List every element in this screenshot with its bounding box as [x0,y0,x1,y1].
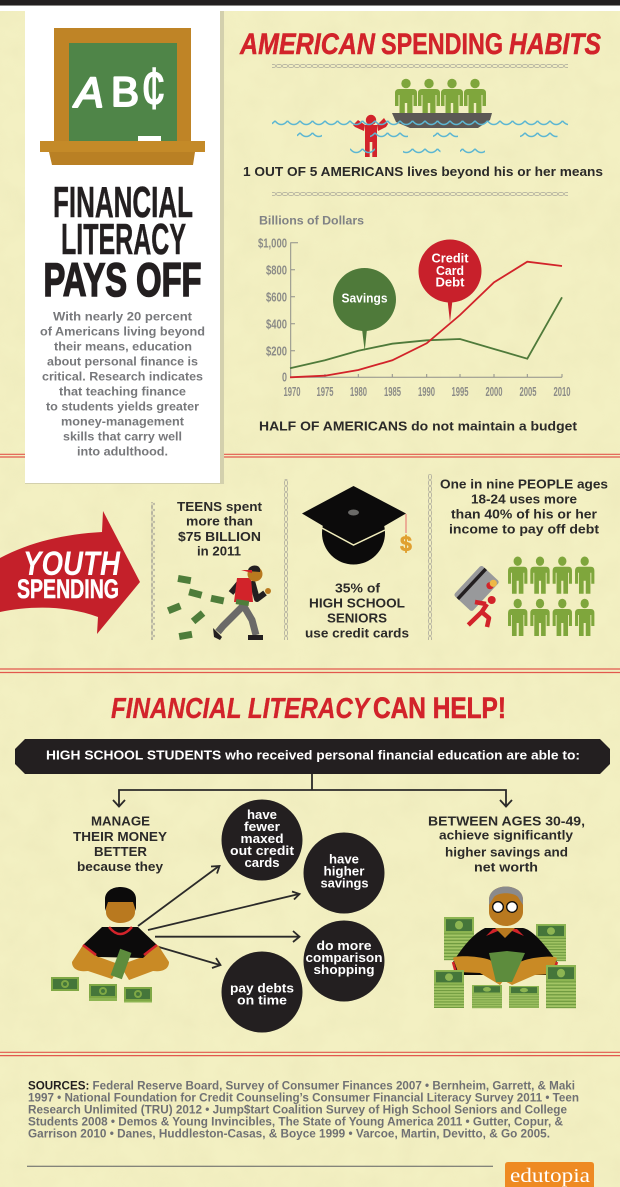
connector arrows from banner [113,774,512,806]
x axis labels: 2000 [486,384,502,399]
intro text [40,310,205,459]
intro text: that teaching finance [59,385,186,399]
circle: fewer maxed out cards: out credit [230,844,295,858]
intro text: of Americans living beyond [40,325,205,339]
logo: edutopia: edutopia [510,1165,590,1187]
title: PAYS OFF [44,253,202,306]
axes [291,243,562,377]
credit card debt line [290,262,562,377]
sources text: Research Unlimited (TRU) 2012 • Jump$tart Coalition Survey of High School Seniors and College [28,1104,567,1116]
heading: American spending habits [239,28,601,61]
intro text: money-management [61,415,184,429]
line chart: savings vs credit card debt [258,215,570,399]
callout: credit card debt: Card [436,264,464,278]
icon: flying money [167,575,224,640]
boat [392,113,492,128]
intro text: With nearly 20 percent [53,310,192,324]
text: one in nine people: income to pay off debt [449,522,600,537]
callout: credit card debt: Debt [436,276,465,290]
text: teens spent [177,499,263,559]
title: LITERACY [61,215,186,264]
heading: American spending habits: SPENDING [381,28,503,61]
text: 35 percent of seniors: HIGH SCHOOL [309,596,405,611]
arrow: youth spending: SPENDING [17,574,119,604]
red divider lines: upper [0,454,620,457]
title: FINANCIAL [53,178,193,227]
icon: blackboard: A [72,69,104,117]
icon: blackboard [40,28,205,165]
text: 35 percent of seniors: use credit cards [305,626,409,641]
chart axis title: Billions of Dollars [259,215,364,227]
circle: fewer maxed out cards [222,800,302,880]
x axis labels: 1990 [418,384,435,399]
icon: running teen [213,566,271,640]
sources text: Students 2008 • Demos & Young Invincibles, The State of Young America 2011 • Gutter, Copur, & [28,1116,563,1128]
x axis labels: 1970 [284,384,300,399]
circle: higher savings [304,832,384,914]
text: one in nine people [440,476,608,537]
text: manage their money: BETTER [94,844,148,859]
circle: fewer maxed out cards: have [247,808,277,822]
text: between ages 30-49: BETWEEN AGES 30-49, [428,814,585,829]
banner: high school students [15,739,610,774]
heading: American spending habits: HABITS [509,28,601,61]
text: teens spent: $75 BILLION [178,529,261,544]
text: between ages 30-49: net worth [474,859,538,874]
intro text: about personal finance is [47,355,198,369]
heading: financial literacy can help: FINANCIAL LITERACY [111,693,371,725]
y axis labels: $1,000 [258,236,287,250]
callout: savings [333,268,396,351]
circle: comparison shopping: shopping [314,963,374,977]
y axis labels: 0 [282,370,287,384]
callout: savings: Savings [342,292,388,306]
text: 35 percent of seniors [305,581,409,641]
icon: student with money [72,887,169,980]
savings line [290,297,562,368]
intro text: skills that carry well [63,430,182,444]
green figures on boat [395,79,486,116]
text: teens spent: more than [186,514,253,529]
icon: adult with stacks of money [434,886,576,1008]
circle: comparison shopping [304,920,384,1002]
sources text: 1997 • National Foundation for Credit Counseling’s Consumer Financial Literacy Survey 2011 • Teen [28,1092,579,1104]
circle: pay debts on time [222,952,302,1032]
text: manage their money: THEIR MONEY [73,829,167,844]
drowning red figure [353,115,388,157]
arrows from student to circles [138,866,300,968]
y axis labels: $200 [266,344,287,358]
icon: blackboard: ¢ [141,56,166,121]
intro text: to students yields greater [46,400,199,414]
sources text: Garrison 2010 • Danes, Huddleston-Casas, & Boyce 1999 • Varcoe, Martin, Devitto, & Go 2005. [28,1128,550,1140]
icon: dollar bills [51,977,152,1002]
waves [272,120,568,154]
x axis labels: 1995 [452,384,468,399]
circle: higher savings: have [329,852,359,866]
y axis labels: $400 [266,316,287,332]
text: between ages 30-49: higher savings and [445,845,568,860]
text: manage their money: MANAGE [91,814,150,829]
circle: pay debts on time: on time [237,994,287,1008]
heading: financial literacy can help: CAN HELP! [373,692,506,725]
text: 35 percent of seniors: 35% of [335,581,381,596]
panel: intro [25,11,224,484]
icon: grid of green people [508,556,594,636]
title [44,178,202,306]
text: teens spent: TEENS spent [177,499,263,514]
sources text [28,1080,579,1140]
heading: American spending habits: AMERICAN [239,28,376,61]
x axis labels: 1985 [384,384,401,399]
callout: credit card debt [418,240,482,322]
arrow: youth spending: YOUTH [23,545,121,583]
stat: 1 out of 5: 1 OUT OF 5 AMERICANS lives beyond his or her means [243,164,603,179]
red divider lines: lower [0,1052,620,1056]
arrow: youth spending [0,511,140,634]
icon: graduation cap [302,486,412,564]
text: 35 percent of seniors: SENIORS [327,611,387,626]
x axis labels: 1975 [316,384,334,399]
callout: credit card debt: Credit [432,252,469,266]
icon: blackboard: B [111,68,139,115]
text: one in nine people: than 40% of his or her [451,507,597,522]
intro text: critical. Research indicates [42,370,203,384]
circle: comparison shopping: do more [316,939,372,953]
x axis labels: 2010 [554,384,570,399]
illustration: people on boat, one in water [272,79,568,157]
logo: edutopia [505,1162,594,1187]
y axis labels: $600 [266,290,287,304]
x axis labels: 2005 [520,384,536,399]
circle: fewer maxed out cards: fewer [244,820,280,834]
text: between ages 30-49 [428,814,585,874]
icon: credit card carrier [453,565,500,627]
banner: high school students: HIGH SCHOOL STUDENTS who received personal financial education are able to: [46,748,580,762]
circle: fewer maxed out cards: cards [244,856,280,870]
circle: higher savings: higher [324,865,365,879]
x axis labels [284,384,570,399]
text: manage their money [73,814,167,874]
sources text: SOURCES: Federal Reserve Board, Survey of Consumer Finances 2007 • Bernheim, Garrett, & Maki [28,1080,575,1092]
y axis labels [258,236,287,384]
text: between ages 30-49: achieve significantly [439,827,574,842]
intro text: into adulthood. [77,445,168,459]
y axis labels: $800 [266,262,287,278]
text: one in nine people: One in nine PEOPLE ages [440,476,608,491]
text: teens spent: in 2011 [197,544,241,559]
circle: pay debts on time: pay debts [230,982,294,996]
x axis labels: 1980 [350,384,367,399]
circle: comparison shopping: comparison [306,951,382,965]
circle: fewer maxed out cards: maxed [240,832,284,846]
circle: higher savings: savings [320,877,369,891]
intro text: their means, education [54,340,192,354]
red divider lines: middle [0,669,620,672]
text: one in nine people: 18-24 uses more [471,492,577,507]
text: manage their money: because they [77,859,164,874]
stat: half of Americans: HALF OF AMERICANS do not maintain a budget [259,419,578,434]
icon: graduation cap: $ [400,533,412,556]
